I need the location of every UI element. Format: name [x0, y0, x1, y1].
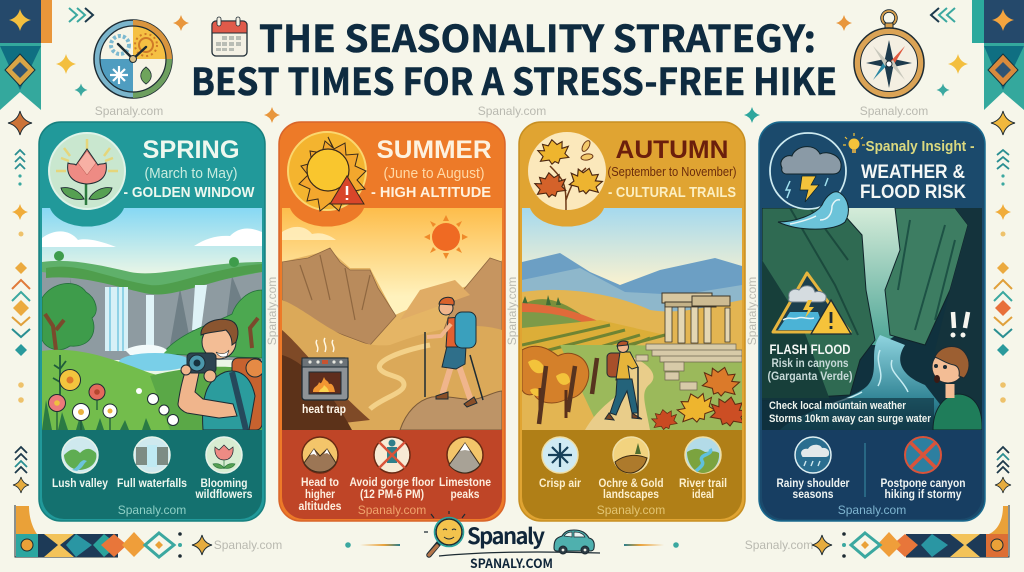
spring header: - GOLDEN WINDOW: [124, 184, 255, 201]
spring footer: [42, 430, 262, 519]
summer scene: [282, 208, 502, 430]
summer header: - HIGH ALTITUDE: [371, 184, 491, 201]
spring icons and labels: [52, 437, 252, 517]
summer icons and labels: Limestone: [439, 477, 491, 489]
insight icons and labels: [776, 437, 966, 517]
spring icons and labels: Full waterfalls: [117, 478, 187, 490]
insight header: WEATHER &: [861, 162, 965, 183]
autumn scene: [522, 208, 749, 431]
panel: summer: [279, 122, 505, 521]
title: THE SEASONALITY STRATEGY:: [259, 9, 816, 63]
worried person: [932, 312, 982, 430]
icon: calendar: [212, 17, 247, 56]
insight scene: Check local mountain weather: [769, 400, 907, 412]
hiker: [425, 297, 483, 407]
insight scene: Storms 10km away can surge water: [769, 413, 932, 425]
bottom separators: [345, 542, 679, 548]
watermarks: Spanaly.com: [478, 104, 546, 118]
bottom left ornament: [15, 505, 212, 558]
autumn leaves: [650, 366, 742, 430]
logo: Spanaly: Spanaly: [467, 519, 545, 551]
autumn footer: [522, 430, 742, 519]
title: BEST TIMES FOR A STRESS-FREE HIKE: [191, 52, 837, 106]
summer header: SUMMER: [376, 136, 492, 164]
hiker with camera: [178, 319, 264, 430]
hiker: [605, 341, 642, 420]
autumn header: - CULTURAL TRAILS: [608, 184, 736, 201]
spring icons and labels: wildflowers: [195, 489, 252, 501]
icon: oven heat trap: [302, 338, 348, 416]
icon: oven heat trap: heat trap: [302, 402, 346, 416]
icon: car: [554, 530, 594, 554]
insight header: Spanaly Insight -: [866, 139, 975, 155]
watermarks: Spanaly.com: [265, 277, 279, 345]
summer header: (June to August): [384, 165, 485, 182]
autumn icons and labels: ideal: [692, 489, 714, 501]
logo: Spanaly: SPANALY.COM: [470, 553, 553, 572]
spring header: [49, 133, 255, 227]
summer icons and labels: (12 PM-6 PM): [360, 489, 424, 501]
insight scene: Risk in canyons: [772, 356, 849, 370]
flash flood warning icon: [773, 273, 851, 334]
autumn icons and labels: Crisp air: [539, 478, 581, 490]
autumn icons and labels: [539, 437, 727, 517]
temple ruins: [636, 293, 742, 390]
watermarks: [95, 104, 928, 552]
panel: weather and flood risk: [759, 122, 985, 521]
summer icons and labels: higher: [305, 489, 335, 501]
watermarks: Spanaly.com: [505, 277, 519, 345]
insight icons and labels: Spanaly.com: [838, 503, 906, 517]
insight icons and labels: Rainy shoulder: [776, 478, 850, 490]
insight icons and labels: seasons: [792, 489, 834, 501]
watermarks: Spanaly.com: [860, 104, 928, 118]
watermarks: Spanaly.com: [95, 104, 163, 118]
insight icons and labels: Postpone canyon: [880, 478, 966, 490]
autumn icons and labels: Spanaly.com: [597, 503, 665, 517]
right border strip: [972, 0, 1024, 493]
spring header: (March to May): [144, 165, 238, 182]
autumn header: [528, 132, 736, 227]
insight icons and labels: hiking if stormy: [884, 489, 962, 501]
spring icons and labels: Blooming: [200, 478, 248, 490]
summer icons and labels: Spanaly.com: [358, 503, 426, 517]
left border strip: [0, 0, 52, 493]
panel: autumn: [519, 122, 749, 521]
title: [191, 9, 837, 106]
summer icons and labels: Head to: [301, 477, 339, 489]
bottom right ornament: [812, 505, 1009, 558]
vineyard foliage: [522, 346, 597, 424]
icon: seasons clock: [94, 20, 172, 98]
insight header: FLOOD RISK: [860, 182, 966, 203]
insight scene: [762, 208, 982, 430]
icon: compass: [854, 11, 924, 98]
spring icons and labels: Lush valley: [52, 478, 109, 490]
watermarks: Spanaly.com: [214, 538, 282, 552]
summer icons and labels: [298, 437, 491, 517]
summer footer: [282, 430, 502, 519]
insight scene: FLASH FLOOD: [770, 341, 850, 357]
insight scene: (Garganta Verde): [768, 369, 852, 383]
autumn icons and labels: landscapes: [603, 489, 659, 501]
autumn header: (September to November): [608, 164, 736, 179]
spring icons and labels: Spanaly.com: [118, 503, 186, 517]
summer icons and labels: peaks: [450, 489, 480, 501]
summer icons and labels: altitudes: [298, 501, 342, 513]
panel: spring: [39, 122, 265, 521]
watermarks: Spanaly.com: [745, 538, 813, 552]
spring header: SPRING: [142, 136, 240, 164]
icon: magnifier with smile: [424, 511, 465, 555]
autumn icons and labels: Ochre & Gold: [598, 478, 664, 490]
logo: Spanaly: [424, 511, 600, 572]
insight header: [770, 133, 975, 229]
watermarks: Spanaly.com: [745, 277, 759, 345]
decorative sparkles: [56, 8, 968, 123]
summer header: [288, 132, 492, 227]
insight footer: [762, 430, 982, 519]
spring scene: [42, 208, 264, 430]
summer icons and labels: Avoid gorge floor: [350, 477, 435, 489]
autumn icons and labels: River trail: [679, 478, 727, 490]
autumn header: AUTUMN: [616, 136, 728, 164]
